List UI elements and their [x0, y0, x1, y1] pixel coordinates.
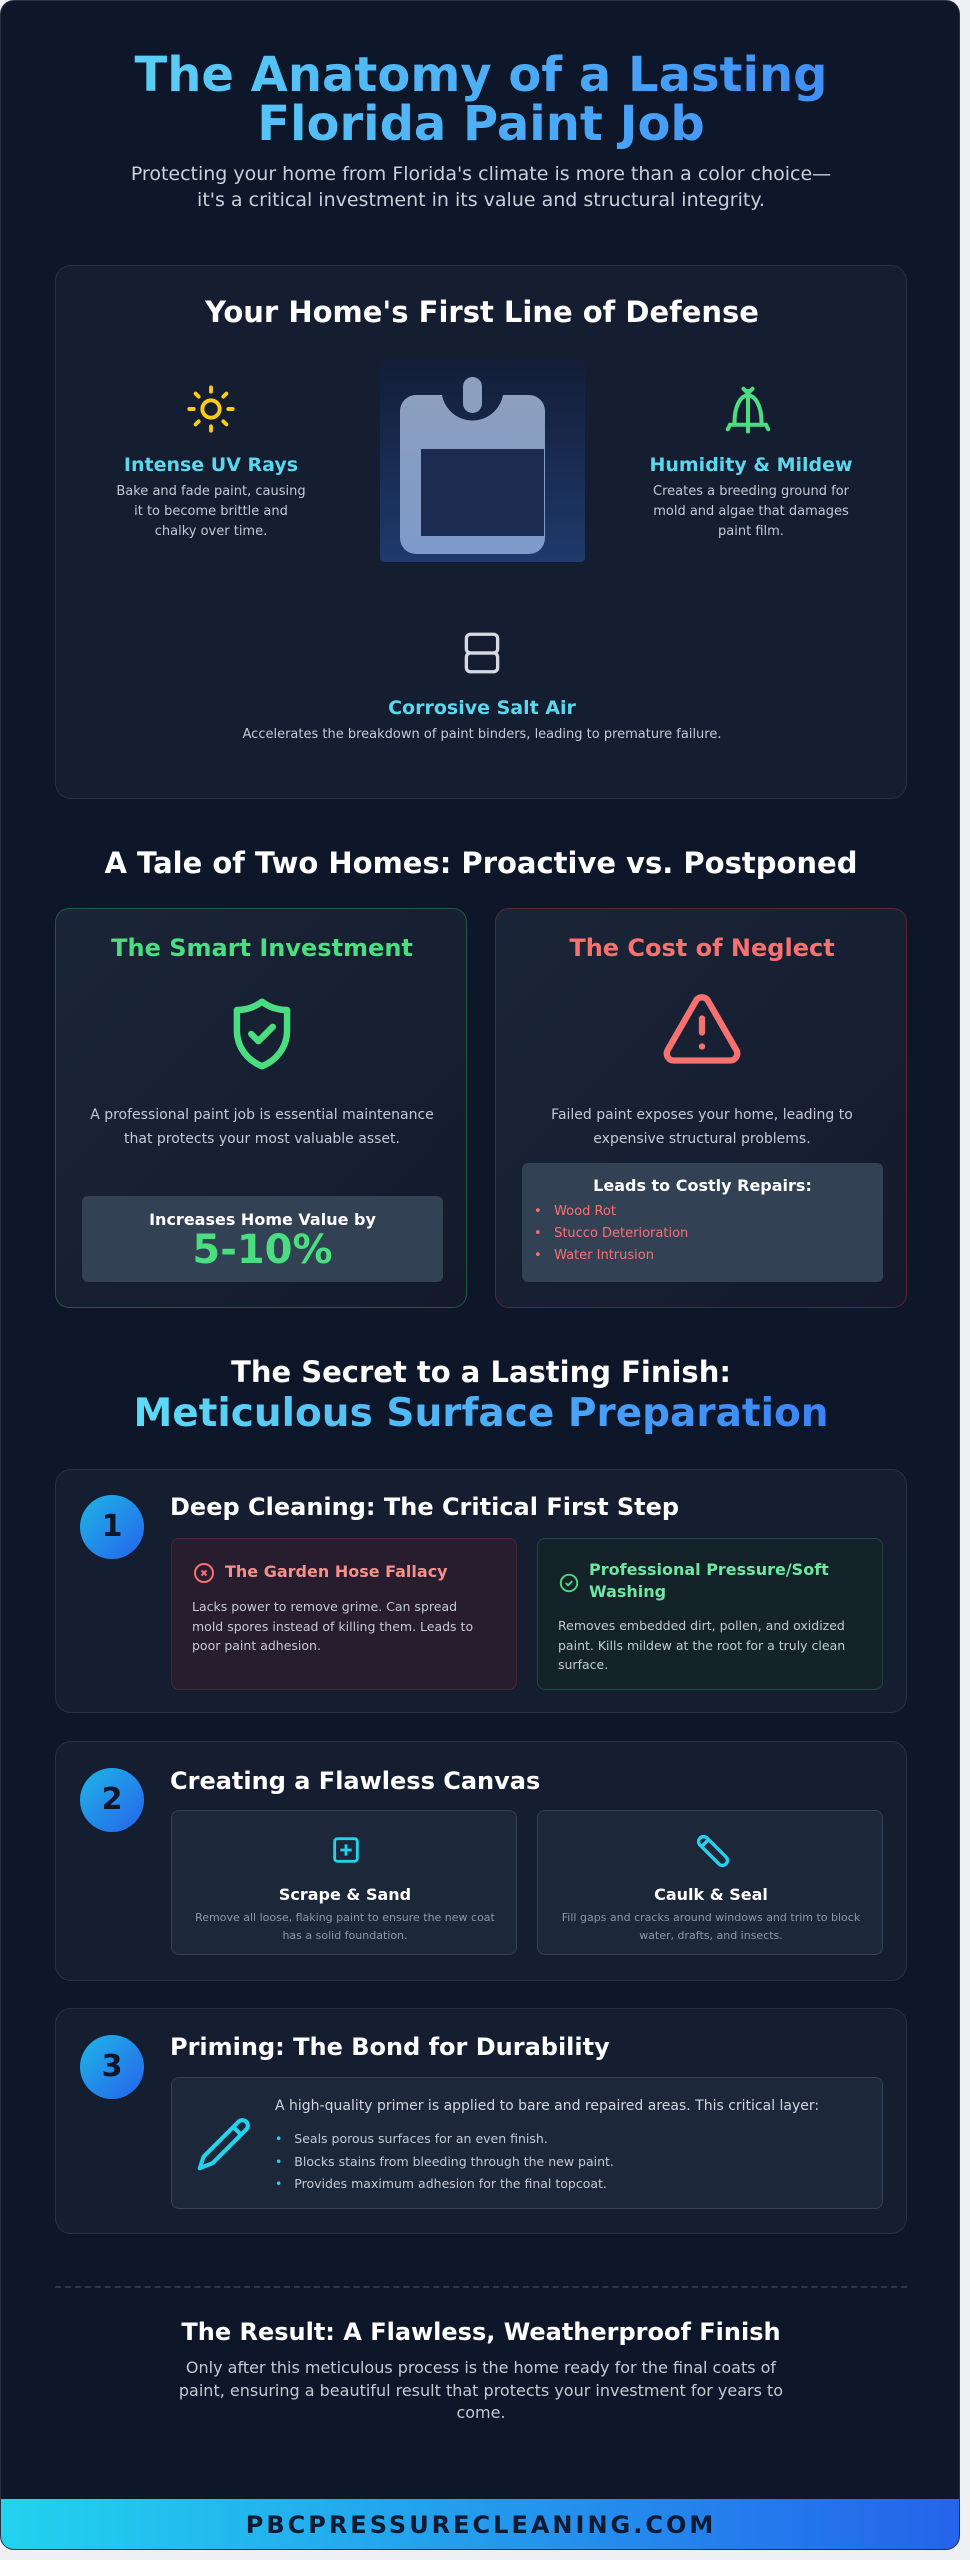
heading: tale of two homes: A Tale of Two Homes: Proactive vs. Postponed [104, 846, 857, 880]
block: humidity [649, 454, 853, 539]
icon: shield [234, 998, 290, 1070]
badge: 2 [80, 1768, 144, 1832]
footer [1, 2499, 961, 2551]
badge: 3: 3 [102, 2049, 122, 2084]
icon: salt air [464, 632, 500, 674]
subtitle: it's a critical investment in its value and structural integrity. [197, 189, 765, 211]
badge: 1 [80, 1495, 144, 1559]
card: garden hose: Lacks power to remove grime. Can spread mold spores instead of killing them. Leads to poor paint adhesion. [192, 1599, 473, 1653]
heading: step 1: Deep Cleaning: The Critical First Step [170, 1493, 679, 1521]
footer: PBCPRESSURECLEANING.COM [246, 2511, 716, 2539]
block: uv rays: Intense UV Rays [124, 454, 298, 476]
icon: bandage [696, 1834, 730, 1868]
card: primer: A high-quality primer is applied to bare and repaired areas. This critical layer: [275, 2098, 819, 2114]
text: smart: A professional paint job is essential maintenance that protects your most valuable asset. [90, 1107, 434, 1147]
block: salt air: Corrosive Salt Air [388, 697, 576, 719]
heading: secret: The Secret to a Lasting Finish: [231, 1355, 731, 1389]
callout: costly repairs: • Wood Rot [534, 1204, 616, 1219]
subtitle [131, 163, 831, 211]
card: garden hose [171, 1538, 517, 1690]
heading: result: The Result: A Flawless, Weatherproof Finish [181, 2318, 781, 2346]
block: salt air [242, 697, 721, 742]
text: result: Only after this meticulous process is the home ready for the final coats of paint, ensuring a beautiful result that protects your investment for years to come. [179, 2358, 783, 2422]
badge: 1: 1 [102, 1509, 122, 1544]
card: scrape & sand [171, 1810, 517, 1955]
title: The Anatomy of a Lasting [134, 47, 827, 103]
block: uv rays: Bake and fade paint, causing it to become brittle and chalky over time. [116, 484, 306, 539]
card: scrape & sand: Remove all loose, flaking paint to ensure the new coat has a solid foundation. [195, 1911, 495, 1942]
card: pressure washing: Removes embedded dirt, pollen, and oxidized paint. Kills mildew at the root for a truly clean surface. [558, 1618, 845, 1672]
heading: meticulous: Meticulous Surface Preparation [133, 1391, 828, 1436]
block: humidity: Creates a breeding ground for mold and algae that damages paint film. [653, 484, 849, 539]
panel: step 1 [55, 1469, 907, 1713]
icon: sun [187, 385, 235, 433]
card: caulk & seal: Fill gaps and cracks around windows and trim to block water, drafts, and insects. [562, 1911, 860, 1942]
image: house panel [380, 367, 585, 562]
card: primer: • Seals porous surfaces for an even finish. [275, 2131, 548, 2146]
panel: smart investment [55, 908, 467, 1308]
panel: first line of defense [55, 265, 907, 799]
card: caulk & seal [537, 1810, 883, 1955]
callout: home value: Increases Home Value by [149, 1210, 376, 1229]
card: garden hose: The Garden Hose Fallacy [225, 1562, 448, 1581]
icon: pencil [198, 2118, 250, 2170]
block: humidity: Humidity & Mildew [649, 454, 853, 476]
heading: step 3: Priming: The Bond for Durability [170, 2033, 610, 2061]
card: primer: • Provides maximum adhesion for the final topcoat. [275, 2176, 607, 2191]
text: neglect: Failed paint exposes your home, leading to expensive structural problems. [551, 1107, 853, 1147]
icon: humidity [726, 386, 770, 434]
badge: 2: 2 [102, 1782, 122, 1817]
callout: costly repairs [522, 1163, 883, 1282]
heading: neglect: The Cost of Neglect [569, 934, 835, 962]
icon: check circle [560, 1574, 578, 1592]
title [1, 51, 961, 149]
badge: 3 [80, 2035, 144, 2099]
title: Florida Paint Job [257, 96, 705, 152]
callout: home value: 5-10% [192, 1227, 333, 1273]
callout: costly repairs: • Water Intrusion [534, 1248, 654, 1263]
card: caulk & seal: Caulk & Seal [654, 1885, 768, 1904]
icon: plus square [333, 1837, 359, 1863]
icon: x circle [194, 1563, 214, 1583]
panel: step 3 [55, 2008, 907, 2234]
panel: cost of neglect [495, 908, 907, 1308]
panel: step 2 [55, 1741, 907, 1981]
callout: costly repairs: Leads to Costly Repairs: [593, 1176, 812, 1195]
callout: costly repairs: • Stucco Deterioration [534, 1226, 688, 1241]
card: pressure washing [537, 1538, 883, 1690]
card: scrape & sand: Scrape & Sand [279, 1885, 411, 1904]
heading: smart investment: The Smart Investment [111, 934, 413, 962]
card: primer [171, 2077, 883, 2209]
block: uv rays [116, 454, 306, 539]
heading: step 2: Creating a Flawless Canvas [170, 1767, 540, 1795]
block: salt air: Accelerates the breakdown of paint binders, leading to premature failure. [243, 727, 721, 742]
callout: home value [82, 1196, 443, 1282]
heading: defense: Your Home's First Line of Defense [205, 295, 759, 329]
subtitle: Protecting your home from Florida's climate is more than a color choice— [131, 163, 831, 185]
card: primer: • Blocks stains from bleeding through the new paint. [275, 2154, 614, 2168]
icon: warning [664, 994, 740, 1064]
card: pressure washing: Professional Pressure/Soft Washing [589, 1560, 829, 1601]
